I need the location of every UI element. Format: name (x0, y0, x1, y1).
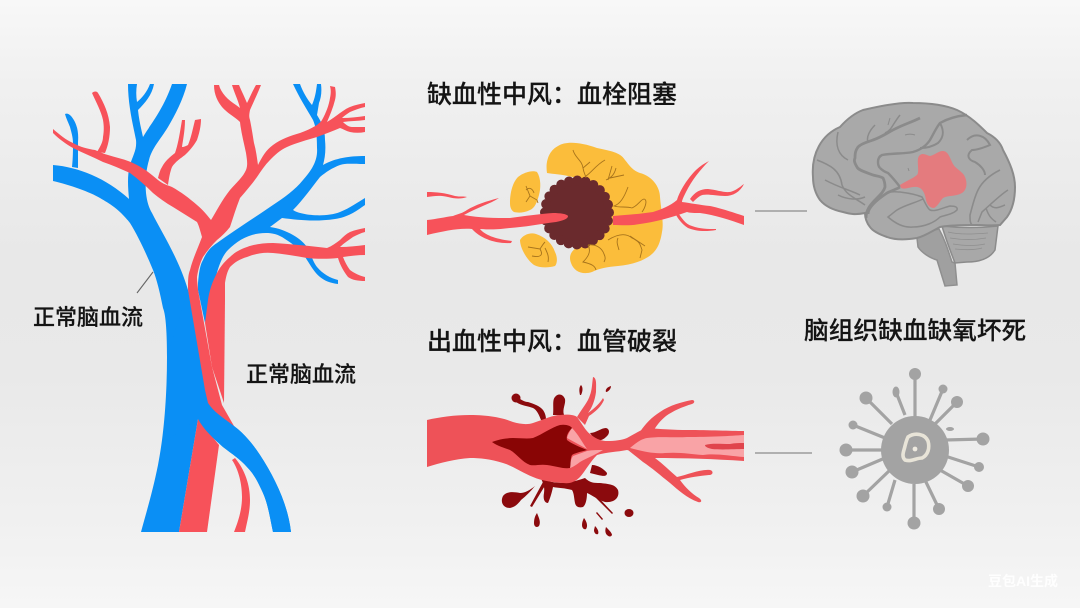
watermark: 豆包AI生成 (988, 573, 1058, 589)
heading: ischemic stroke: 缺血性中风：血栓阻塞 (427, 81, 677, 109)
illustration: ischemic stroke clot (427, 143, 744, 273)
dark streak in lumen (705, 443, 744, 449)
leader line: normal blood flow (137, 272, 153, 293)
cell body and knobs (840, 368, 990, 530)
infarct zone (900, 151, 966, 208)
plaque cracks (526, 150, 646, 270)
fatty plaque blobs (510, 143, 663, 273)
icon: necrotic cell (840, 368, 990, 530)
sulci lines (817, 115, 1008, 227)
label: normal flow right: 正常脑血流 (246, 362, 356, 387)
illustration: ruptured vessel hemorrhage (427, 377, 744, 536)
brain silhouette (813, 103, 1015, 239)
diagram: normal cerebral vessel tree (53, 84, 365, 532)
cell nucleus (903, 434, 929, 461)
label: tissue necrosis: 脑组织缺血缺氧坏死 (804, 318, 1026, 345)
blue vein crossing over red (167, 290, 291, 532)
icon: brain with infarct (813, 103, 1015, 286)
brain stem (917, 229, 957, 286)
blue veins upper layer (53, 84, 365, 532)
label: normal flow left: 正常脑血流 (33, 305, 143, 330)
cerebellum (942, 226, 998, 263)
occluded artery (427, 161, 744, 243)
cerebellum folds (948, 232, 988, 250)
dark blood pool (492, 425, 587, 468)
cell spikes (846, 374, 983, 523)
clot (545, 180, 609, 244)
ruptured artery body (427, 377, 744, 502)
blood splatter (502, 385, 634, 536)
red arteries (53, 85, 365, 532)
connector line: ischemic (755, 210, 807, 212)
heading: hemorrhagic stroke: 出血性中风：血管破裂 (427, 328, 677, 356)
connector line: hemorrhagic (755, 452, 812, 454)
pale inner lumen (567, 428, 744, 468)
